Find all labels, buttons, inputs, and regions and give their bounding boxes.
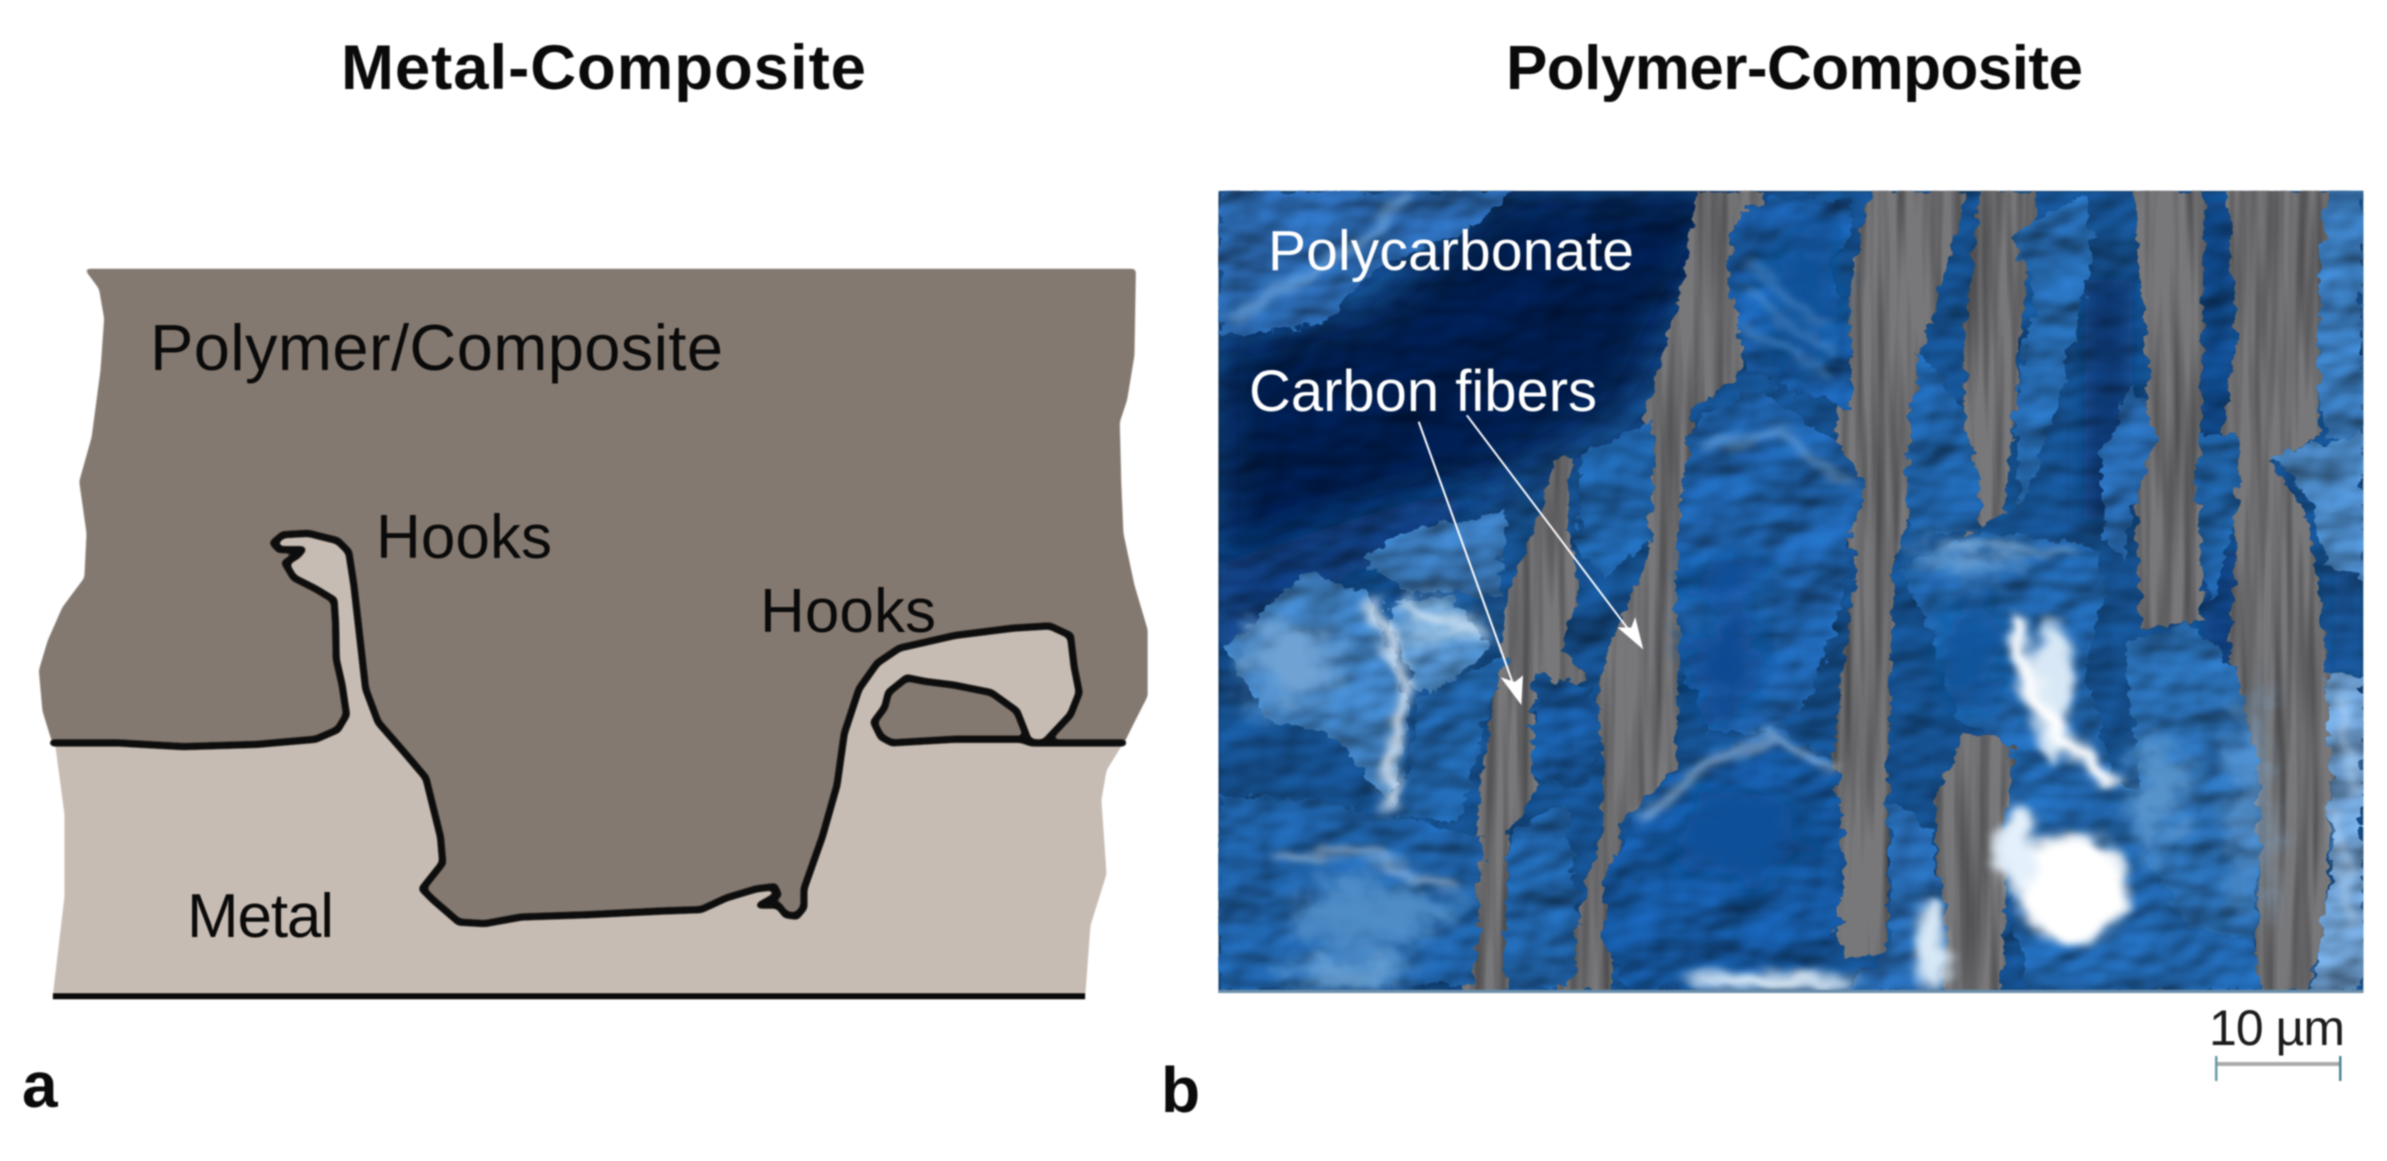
panel a: metal-composite schematic — [39, 269, 1148, 996]
arrow: carbon fiber 2 — [1467, 415, 1643, 649]
label: Polymer/Composite: Polymer/Composite — [150, 311, 723, 384]
scale bar label: 10 µm — [2209, 1000, 2345, 1056]
matrix base with dark upper left — [1218, 191, 2363, 991]
panel letter b: b — [1161, 1054, 1200, 1126]
label: Metal: Metal — [187, 882, 334, 951]
photo bottom edge — [1218, 990, 2363, 993]
title: Polymer-Composite: Polymer-Composite — [1506, 34, 2083, 103]
label: Hooks (right): Hooks — [760, 577, 936, 646]
arrow: carbon fiber 1 — [1419, 422, 1523, 705]
metal layer — [53, 533, 1123, 996]
panel b: SEM micrograph — [1218, 189, 2363, 993]
panel letter a: a — [22, 1049, 58, 1121]
interface line — [53, 533, 1123, 924]
base line — [53, 992, 1085, 1000]
label: Hooks (left): Hooks — [376, 503, 552, 572]
scale bar — [2215, 1056, 2342, 1081]
bright ridge highlights — [1234, 195, 2357, 991]
title: Metal-Composite: Metal-Composite — [341, 33, 866, 103]
polymer layer — [39, 269, 1148, 922]
label: Polycarbonate: Polycarbonate — [1268, 219, 1634, 283]
polymer matrix blobs — [1218, 189, 2363, 991]
carbon fibers — [1463, 191, 2349, 991]
shading on blobs — [1246, 228, 2261, 988]
label: Carbon fibers: Carbon fibers — [1249, 359, 1597, 424]
